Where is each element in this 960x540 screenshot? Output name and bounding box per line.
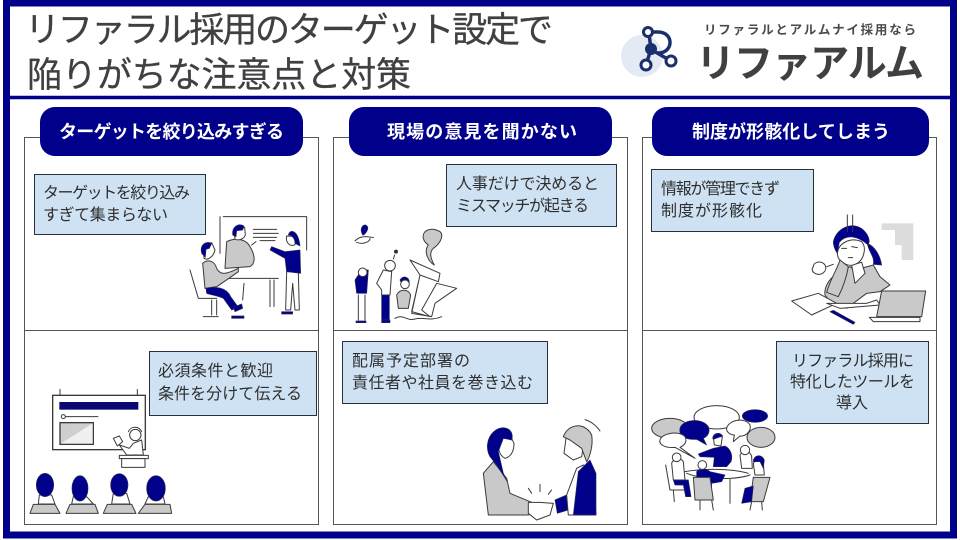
callout: solution: 条件を分けて伝える	[158, 385, 302, 403]
callout: problem: 制度が形骸化	[661, 202, 762, 220]
callout: solution: 特化したツールを	[790, 373, 915, 391]
title: 陥りがちな注意点と対策	[27, 56, 411, 95]
callout: problem: すぎて集まらない	[43, 206, 168, 224]
callout: solution: リファラル採用に	[792, 352, 914, 370]
callout: problem	[446, 164, 616, 226]
callout: problem	[34, 174, 206, 234]
heading: 現場の意見を聞かない	[387, 122, 577, 142]
callout: solution: 必須条件と歓迎	[158, 362, 273, 380]
heading: 制度が形骸化してしまう	[692, 121, 890, 142]
callout: solution: 導入	[836, 393, 868, 412]
icon: presentation to audience	[30, 389, 172, 513]
callout: solution	[150, 352, 316, 416]
panel: not listening to the field	[333, 107, 628, 524]
logo tagline: リファラルとアルムナイ採用なら	[704, 22, 916, 37]
callout: problem: ミスマッチが起きる	[456, 197, 589, 215]
icon: tired office worker at laptop	[792, 215, 926, 324]
panel: system becomes a formality	[642, 107, 937, 524]
callout: solution: 責任者や社員を巻き込む	[352, 374, 533, 392]
heading: ターゲットを絞り込みすぎる	[59, 121, 284, 142]
title: リファラル採用のターゲット設定で	[25, 11, 553, 50]
icon: team discussion with speech bubbles	[652, 406, 775, 510]
icon: handshake	[483, 420, 600, 520]
logo wordmark: リファアルム	[696, 43, 924, 86]
logo	[621, 22, 924, 86]
heading	[652, 107, 929, 156]
heading	[40, 107, 303, 156]
callout: problem: ターゲットを絞り込み	[43, 184, 190, 202]
callout: solution	[342, 342, 548, 404]
callout: problem	[652, 170, 814, 232]
callout: solution: 配属予定部署の	[352, 352, 470, 370]
callout: problem: 人事だけで決めると	[456, 175, 599, 193]
panel: target too narrow	[24, 107, 319, 524]
callout: problem: 情報が管理できず	[661, 180, 780, 198]
title	[25, 11, 553, 95]
icon: meeting at whiteboard	[190, 217, 307, 318]
heading	[349, 107, 612, 156]
icon: network R mark	[621, 28, 676, 77]
callout: solution	[776, 342, 928, 424]
icon: people looking at a wreck	[355, 225, 457, 323]
